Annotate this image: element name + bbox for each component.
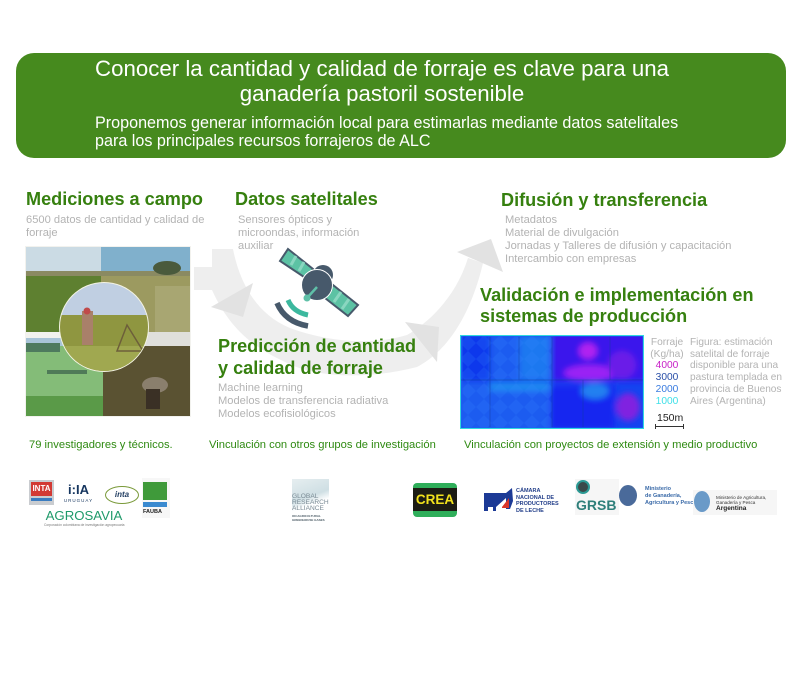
logo: Ministerio Argentina: Ministerio de Agricultura,	[716, 495, 766, 500]
header banner	[16, 53, 786, 158]
logo: INIA Uruguay: i:IA	[68, 482, 89, 497]
text: Datos satelitales: auxiliar	[238, 240, 273, 252]
logo: INTA	[29, 480, 54, 505]
text: Predicción: Machine learning	[218, 382, 303, 394]
logo: Global Research Alliance: RESEARCH	[292, 499, 329, 506]
heading: Mediciones a campo: Mediciones a campo	[26, 189, 203, 209]
logo: INTA: INTA	[32, 484, 51, 493]
heading: Difusión y transferencia: Difusión y transferencia	[501, 190, 707, 210]
logo: GRSB: GRSB	[576, 497, 616, 513]
legend: forage scale: 4000	[656, 360, 678, 371]
text: figure caption: disponible para una	[690, 360, 778, 371]
logo: Cámara Nacional de Productores de Leche: PRODUCTORES	[516, 501, 559, 507]
text: Predicción: Modelos de transferencia radiativa	[218, 395, 388, 407]
logo: Ministerio Uruguay: Ministerio	[645, 486, 671, 492]
heading: Validación	[480, 285, 754, 326]
legend: forage scale: 1000	[656, 396, 678, 407]
text: Predicción: Modelos ecofisiológicos	[218, 408, 336, 420]
heading: Validación: Validación e implementación en	[480, 285, 754, 305]
title: ganadería pastoril sostenible	[240, 81, 524, 106]
logo: Global Research Alliance: GREENHOUSE GASES	[292, 518, 325, 522]
heading: Validación: sistemas de producción	[480, 306, 687, 326]
text: figure caption: satelital de forraje	[690, 349, 770, 360]
label: grupos de investigación: Vinculación con otros grupos de investigación	[209, 439, 436, 451]
text: Difusión y transferencia	[505, 214, 731, 265]
logo: Cámara Nacional de Productores de Leche: CÁMARA	[516, 488, 540, 494]
text: Difusión y transferencia: Jornadas y Talleres de difusión y capacitación	[505, 240, 731, 252]
logo: AGROSAVIA: AGROSAVIA	[46, 508, 122, 523]
heading: Predicción: Predicción de cantidad	[218, 336, 416, 356]
icon: satellite	[274, 248, 360, 329]
logo: Cámara Nacional de Productores de Leche: DE LECHE	[516, 508, 544, 514]
legend: forage scale: (Kg/ha)	[650, 349, 684, 360]
legend: forage scale: Forraje	[651, 337, 683, 348]
heading: Datos satelitales: Datos satelitales	[235, 189, 378, 209]
logo: AGROSAVIA: Corporación colombiana de investigación agropecuaria	[44, 523, 124, 527]
text: Difusión y transferencia: Material de divulgación	[505, 227, 619, 239]
text: Mediciones a campo	[26, 214, 204, 239]
text: Datos satelitales: microondas, información	[238, 227, 359, 239]
text: Mediciones a campo: 6500 datos de cantidad y calidad de	[26, 214, 204, 226]
logo: FAUBA: FAUBA	[143, 509, 162, 515]
text: figure caption: provincia de Buenos	[690, 384, 781, 395]
text: figure caption: Aires (Argentina)	[690, 396, 766, 407]
logo: CREA	[413, 483, 457, 517]
text: Difusión y transferencia: Intercambio con empresas	[505, 253, 636, 265]
logo: Ministerio Uruguay	[619, 485, 693, 506]
heading: Predicción: y calidad de forraje	[218, 358, 383, 378]
logo: Ministerio Argentina	[693, 490, 777, 515]
text: Datos satelitales: Sensores ópticos y	[238, 214, 332, 226]
logo: Ministerio Argentina: Argentina	[716, 505, 746, 512]
heading: Predicción	[218, 336, 416, 378]
subtitle: Proponemos generar información local para estimarlas mediante datos satelitales	[95, 114, 678, 132]
logo: GRSB	[575, 479, 619, 515]
logo: Global Research Alliance: ALLIANCE	[292, 505, 324, 512]
logo: Ministerio Argentina: Ganadería y Pesca	[716, 500, 755, 505]
legend: forage scale: 3000	[656, 372, 678, 383]
logo: Ministerio Uruguay: de Ganadería,	[645, 493, 681, 499]
logo: CREA: CREA	[416, 492, 454, 507]
text: figure caption: pastura templada en	[690, 372, 782, 383]
text: Datos satelitales	[238, 214, 359, 252]
text: figure caption	[690, 337, 782, 407]
text: figure caption: Figura: estimación	[690, 337, 772, 348]
title: Conocer la cantidad y calidad de forraje es clave para una	[95, 56, 669, 81]
text: Predicción	[218, 382, 388, 420]
logo: Cámara Nacional de Productores de Leche	[484, 487, 559, 514]
logo: Global Research Alliance: ON AGRICULTURAL	[292, 514, 321, 518]
legend: forage scale	[650, 337, 684, 407]
text: Difusión y transferencia: Metadatos	[505, 214, 557, 226]
photo collage	[25, 246, 191, 417]
subtitle: para los principales recursos forrajeros de ALC	[95, 132, 431, 150]
label: proyectos: Vinculación con proyectos de extensión y medio productivo	[464, 439, 757, 451]
logo: Cámara Nacional de Productores de Leche: NACIONAL DE	[516, 495, 554, 501]
scale bar: 150m	[657, 412, 683, 424]
logo: FAUBA	[142, 478, 170, 518]
logo: Global Research Alliance	[292, 479, 329, 525]
logo: inta ellipse: inta	[115, 490, 129, 499]
logo: INIA Uruguay: URUGUAY	[64, 498, 93, 503]
legend: forage scale: 2000	[656, 384, 678, 395]
subtitle	[95, 114, 678, 150]
map: forage heatmap	[460, 335, 644, 429]
logo: Global Research Alliance: GLOBAL	[292, 493, 318, 500]
logo: INIA Uruguay	[64, 482, 93, 503]
title	[95, 56, 669, 106]
label: investigadores: 79 investigadores y técnicos.	[29, 439, 173, 451]
text: Mediciones a campo: forraje	[26, 227, 58, 239]
